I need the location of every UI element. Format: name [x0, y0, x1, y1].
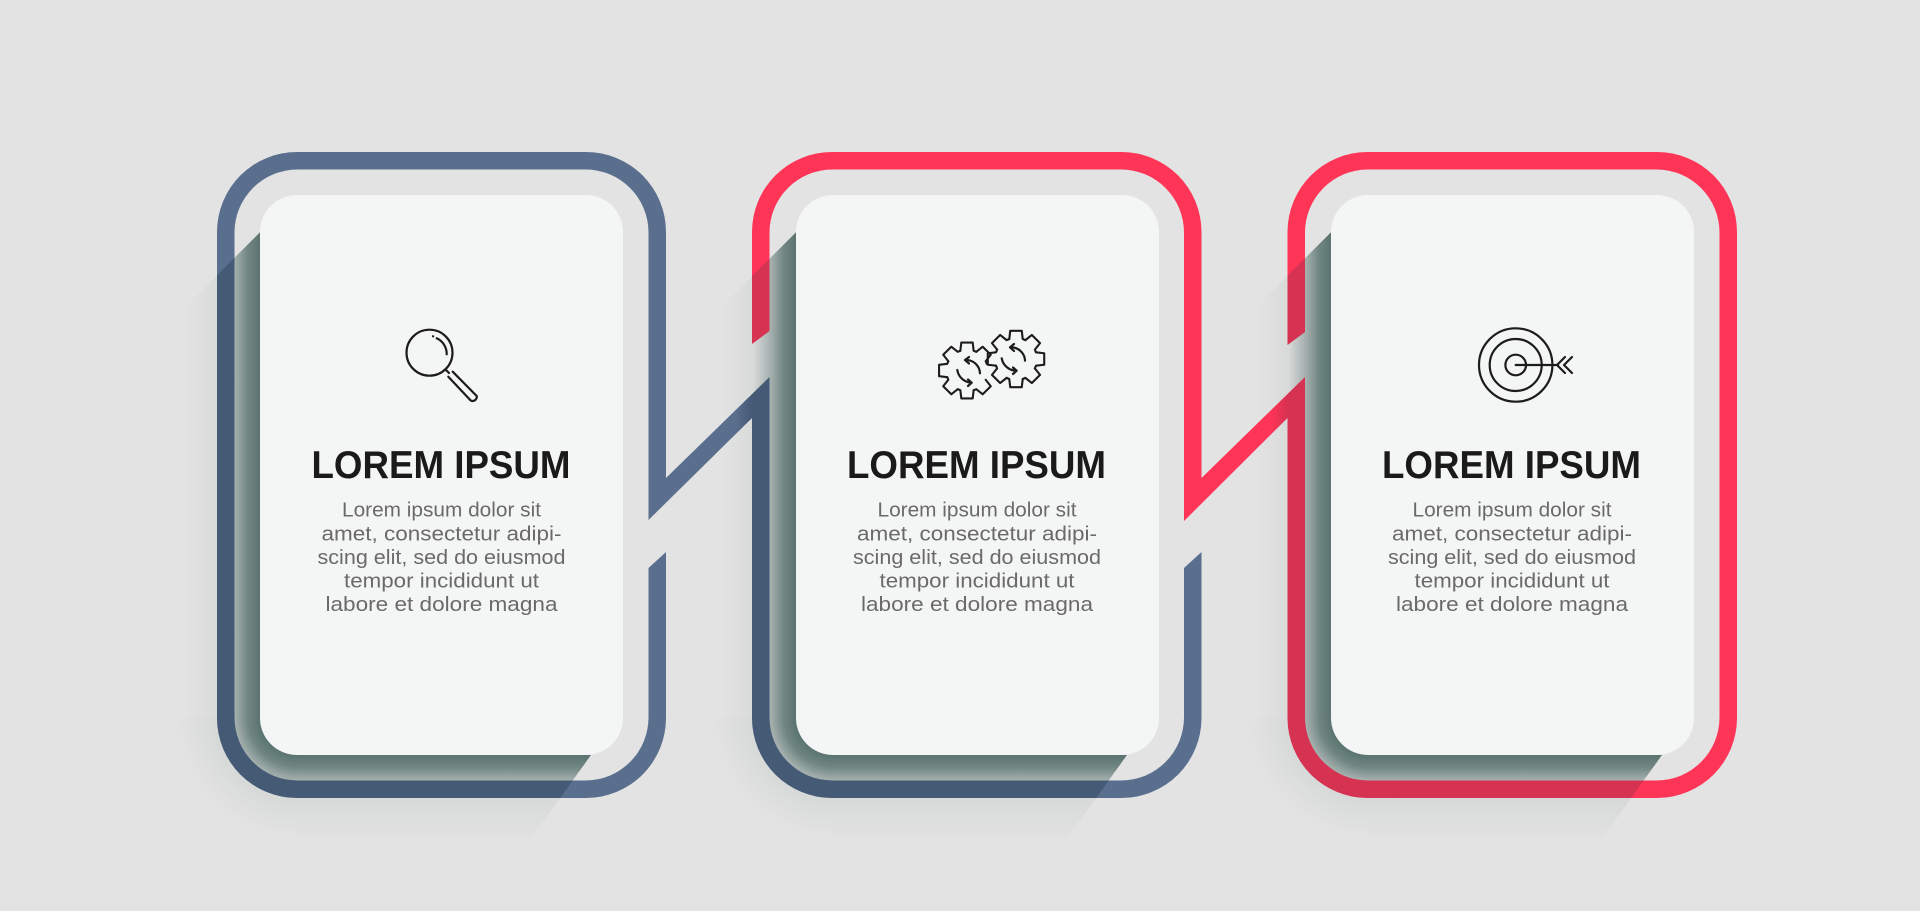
heading: LOREM IPSUM — [847, 444, 1106, 487]
connector frame: red line around steps 2 and 3 — [752, 152, 1737, 798]
body text: scing elit, sed do eiusmod — [1388, 546, 1636, 569]
card background — [796, 195, 1159, 755]
body text: labore et dolore magna — [861, 593, 1094, 616]
body text: labore et dolore magna — [1396, 593, 1629, 616]
body text: amet, consectetur adipi- — [322, 522, 562, 546]
body text: amet, consectetur adipi- — [1392, 522, 1632, 546]
body text: scing elit, sed do eiusmod — [318, 546, 566, 569]
body text — [318, 498, 566, 616]
body text: scing elit, sed do eiusmod — [853, 546, 1101, 569]
heading: LOREM IPSUM — [1382, 444, 1641, 487]
body text: tempor incididunt ut — [344, 570, 539, 592]
body text: Lorem ipsum dolor sit — [878, 498, 1077, 522]
long shadows behind the cards — [150, 232, 1662, 865]
card background — [1331, 195, 1694, 755]
body text: Lorem ipsum dolor sit — [1412, 498, 1612, 522]
body text: tempor incididunt ut — [1414, 570, 1610, 592]
icon: target with arrow — [1479, 328, 1572, 402]
body text — [1388, 498, 1636, 616]
body text: labore et dolore magna — [326, 593, 558, 616]
panel: step 3 card — [1331, 195, 1694, 755]
panel: step 1 card — [260, 195, 623, 755]
shadow tint over the red frame — [752, 258, 1644, 798]
icon: gears — [939, 331, 1044, 398]
heading: LOREM IPSUM — [312, 444, 570, 487]
icon: magnifying glass — [406, 330, 477, 401]
body text — [853, 498, 1101, 616]
card background — [260, 195, 623, 755]
body text: Lorem ipsum dolor sit — [342, 498, 541, 522]
panel: step 2 card — [796, 195, 1159, 755]
body text: amet, consectetur adipi- — [857, 522, 1097, 546]
body text: tempor incididunt ut — [880, 570, 1075, 592]
connector frame: blue line around steps 1 and 2 — [217, 152, 1202, 798]
shadow tint over the blue frame — [217, 258, 1108, 798]
